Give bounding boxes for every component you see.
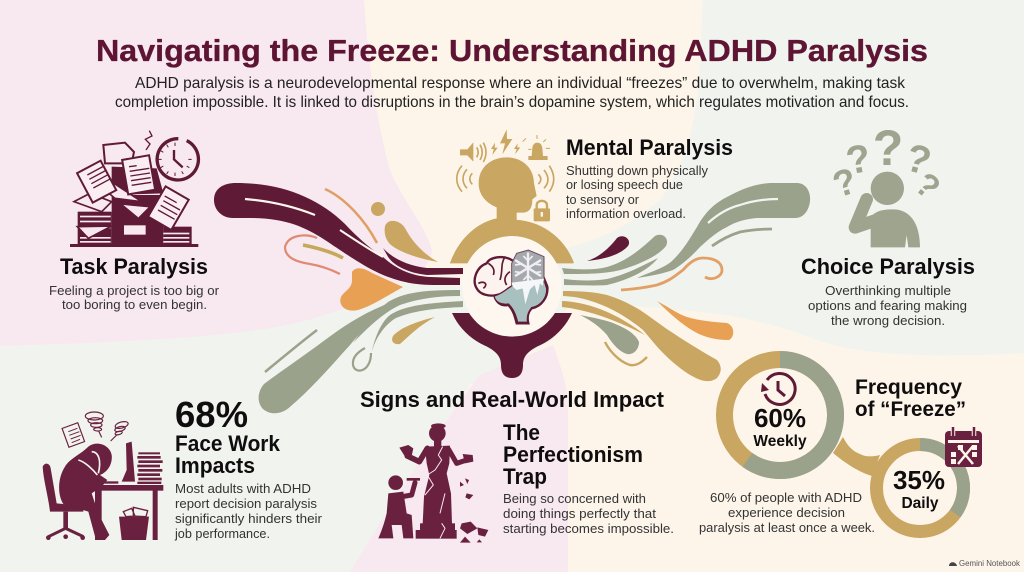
icon: gold head silhouette with sensory icons <box>450 129 573 263</box>
description: options and fearing making <box>808 298 967 313</box>
icon: sculptor chipping statue <box>378 423 488 543</box>
panel: choice paralysis <box>801 120 975 328</box>
description: 60% of people with ADHD <box>710 490 862 505</box>
description <box>503 491 674 536</box>
heading: Task Paralysis <box>60 254 208 279</box>
title: Navigating the Freeze: Understanding ADHD Paralysis <box>96 33 928 68</box>
heading: Choice Paralysis <box>801 254 975 279</box>
description <box>699 490 875 535</box>
description: doing things perfectly that <box>503 506 656 521</box>
left streams <box>214 183 463 413</box>
icon: person with question marks: ? <box>907 166 947 207</box>
heading <box>175 431 281 478</box>
icon: person with question marks: ? <box>828 160 862 205</box>
description: significantly hinders their <box>175 511 323 526</box>
description: report decision paralysis <box>175 496 317 511</box>
icon: calendar with cross <box>945 427 982 467</box>
heading <box>503 420 643 489</box>
description: too boring to even begin. <box>62 297 207 312</box>
panel: work impacts <box>43 394 323 541</box>
statistic: 35% daily <box>893 465 945 512</box>
panel: mental paralysis <box>566 135 733 221</box>
icon: person with question marks: ? <box>843 136 874 183</box>
icon: history clock <box>761 373 795 404</box>
icon: person with question marks: ? <box>873 120 903 176</box>
description: starting becomes impossible. <box>503 521 674 536</box>
central hub: person, ring and brain <box>450 129 574 378</box>
heading <box>855 376 966 421</box>
panel: task paralysis <box>49 131 220 312</box>
donut: daily 35% <box>876 444 964 532</box>
statistic: 60% weekly: 60% <box>754 403 806 433</box>
description <box>174 481 323 541</box>
panel: perfectionism trap <box>378 420 674 543</box>
description <box>49 283 220 312</box>
description: or losing speech due <box>566 177 683 192</box>
statistic: 68%: 68% <box>175 394 248 435</box>
heading: Frequency <box>855 376 962 399</box>
description <box>808 283 967 328</box>
description: Overthinking multiple <box>825 283 951 298</box>
description: information overload. <box>566 206 686 221</box>
description: paralysis at least once a week. <box>699 520 875 535</box>
description <box>566 163 708 221</box>
section heading: Signs and Real-World Impact <box>360 387 665 412</box>
description: experience decision <box>728 505 845 520</box>
heading: Mental Paralysis <box>566 135 733 160</box>
heading: Impacts <box>175 453 255 478</box>
description: Shutting down physically <box>566 163 708 178</box>
icon: person with question marks: ? <box>901 135 936 184</box>
statistic: 35% daily: 35% <box>893 465 945 495</box>
statistic: 60% weekly: Weekly <box>753 433 807 450</box>
donut: weekly 60% <box>724 360 836 470</box>
icon: person with question marks <box>828 120 947 247</box>
intro text <box>115 75 909 111</box>
icon: pile of papers and clock <box>70 131 198 247</box>
heading: The <box>503 420 540 445</box>
statistic: 35% daily: Daily <box>901 495 939 512</box>
intro text: ADHD paralysis is a neurodevelopmental response where an individual “freezes” due to overwhelm, making task <box>135 75 906 92</box>
panel: frequency of freeze <box>699 360 982 535</box>
connector <box>833 437 880 476</box>
intro text: completion impossible. It is linked to disruptions in the brain’s dopamine system, which regulates motivation and focus. <box>115 94 909 111</box>
icon: frozen brain <box>475 250 547 323</box>
right streams <box>562 183 810 381</box>
heading: Perfectionism <box>503 442 643 467</box>
heading: of “Freeze” <box>855 398 966 421</box>
description: Most adults with ADHD <box>175 481 311 496</box>
icon: overwhelmed person at desk <box>43 412 163 540</box>
heading: Face Work <box>175 431 281 456</box>
description: Being so concerned with <box>503 491 646 506</box>
description: the wrong decision. <box>831 313 945 328</box>
footer: notebook credit: Gemini Notebook <box>959 558 1021 568</box>
description: to sensory or <box>566 192 640 207</box>
heading: Trap <box>503 464 547 489</box>
description: job performance. <box>174 526 270 541</box>
description: Feeling a project is too big or <box>49 283 220 298</box>
statistic: 60% weekly <box>753 403 807 450</box>
